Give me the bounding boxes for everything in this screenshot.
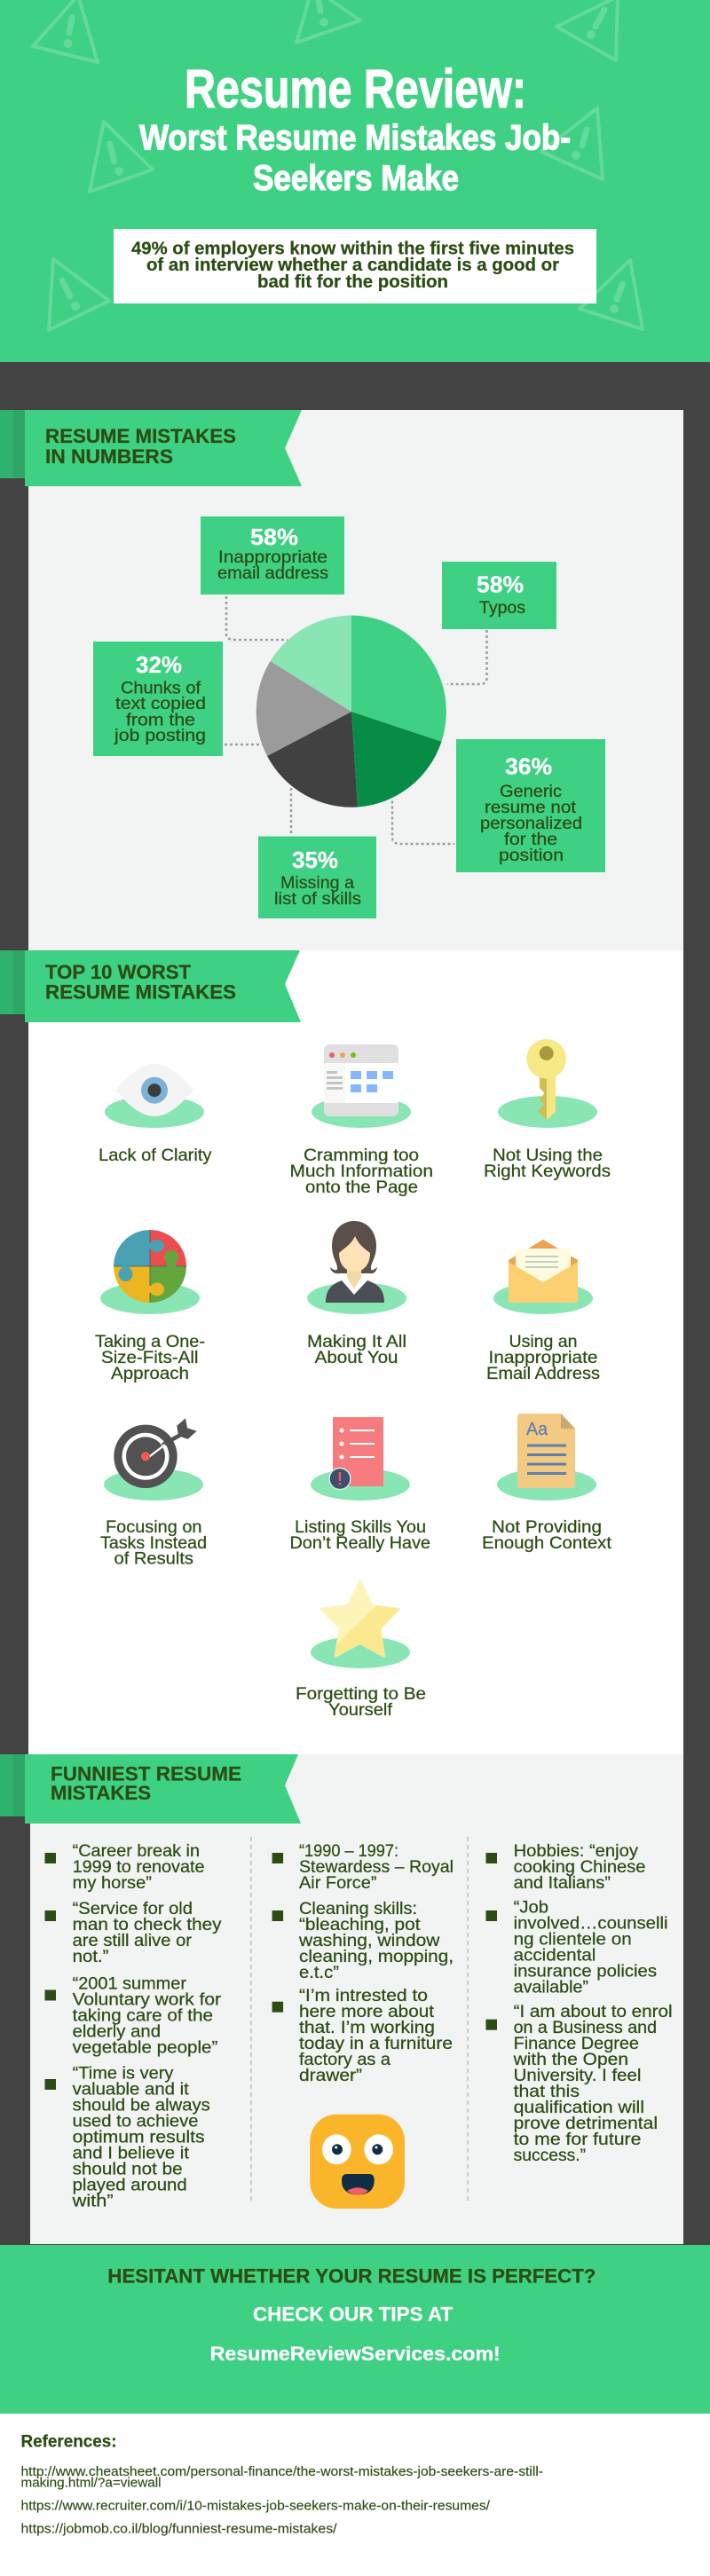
column 1 quotes: my horse” <box>73 1874 152 1893</box>
column 3 quotes: and Italians” <box>514 1874 611 1893</box>
title: Resume Review: <box>185 59 526 119</box>
column 1 quotes: 1999 to renovate <box>73 1858 205 1877</box>
column 3 quotes: success.” <box>514 2147 586 2165</box>
column 3 quotes: that this <box>514 2083 580 2101</box>
callout: generic resume: resume not <box>485 799 577 817</box>
callout: generic resume: Generic <box>500 783 562 801</box>
item: not using the right keywords <box>484 1039 611 1181</box>
callout: missing skills <box>258 836 376 918</box>
heading banner: funniest: MISTAKES <box>51 1782 151 1804</box>
column 1 quotes: not.” <box>73 1948 108 1966</box>
title <box>139 59 571 198</box>
item: not providing enough context: Enough Context <box>482 1534 612 1553</box>
item: lack of clarity: Lack of Clarity <box>99 1146 212 1165</box>
item: not using the right keywords: Not Using the <box>493 1146 603 1165</box>
column 1 quotes: optimum results <box>73 2128 205 2147</box>
callout: typos: Typos <box>479 599 525 618</box>
heading banner: top 10: RESUME MISTAKES <box>45 981 236 1004</box>
pie chart <box>256 616 446 807</box>
panel: resume mistakes in numbers <box>0 410 683 950</box>
call to action banner: ResumeReviewServices.com! <box>210 2343 501 2365</box>
column 1 quotes: should be always <box>73 2096 210 2115</box>
item: listing skills you don't have: Listing Skills You <box>295 1518 426 1537</box>
intro statistic box: bad fit for the position <box>257 272 448 292</box>
column 3 quotes: “I am about to enrol <box>514 2003 673 2021</box>
item: focusing on tasks <box>100 1418 207 1569</box>
header panel <box>0 0 710 362</box>
item: listing skills you don't have: Don’t Really Have <box>289 1534 430 1553</box>
column 3 quotes: insurance policies <box>514 1963 657 1981</box>
item: not providing enough context: Not Providing <box>492 1518 602 1537</box>
column 2 quotes: Cleaning skills: <box>299 1900 417 1918</box>
column 1 quotes: used to achieve <box>73 2112 198 2131</box>
column 2 quotes: here more about <box>299 2003 435 2021</box>
column 2 quotes: drawer” <box>299 2067 362 2085</box>
icon: eye <box>115 1064 193 1116</box>
column 2 quotes: factory as a <box>299 2051 390 2069</box>
callout: generic resume: for the <box>504 831 557 849</box>
item: cramming too much information: onto the Page <box>305 1178 418 1197</box>
icon: surprised face <box>310 2115 405 2209</box>
callout: generic resume <box>456 739 605 872</box>
column 3 quotes: available” <box>514 1979 588 1997</box>
icon: envelope <box>509 1240 578 1303</box>
warning triangles background <box>33 0 643 330</box>
item: not providing enough context <box>482 1414 612 1553</box>
item: forgetting to be yourself: Yourself <box>328 1701 393 1720</box>
column 2 quotes: cleaning, mopping, <box>299 1948 454 1966</box>
column 3 quotes: University. I feel <box>514 2067 641 2085</box>
item: making it all about you: Making It All <box>307 1333 406 1351</box>
column 3 quotes: with the Open <box>512 2051 628 2069</box>
column 3 quotes <box>486 1842 673 2165</box>
item: not using the right keywords: Right Keywords <box>484 1162 611 1181</box>
item: one-size-fits-all: Size-Fits-All <box>101 1349 199 1367</box>
heading banner: top 10 <box>0 950 301 1022</box>
item: focusing on tasks: Focusing on <box>106 1518 202 1537</box>
column 1 quotes: with” <box>71 2192 114 2211</box>
callout: missing skills: 35% <box>292 847 338 873</box>
heading banner: resume mistakes in numbers: IN NUMBERS <box>45 445 173 468</box>
column 1 quotes: elderly and <box>73 2022 161 2041</box>
column 3 quotes: Hobbies: “enjoy <box>514 1842 639 1861</box>
column 1 quotes: and I believe it <box>73 2144 190 2163</box>
callout: inappropriate email: Inappropriate <box>218 548 327 567</box>
intro statistic box: 49% of employers know within the first five minutes <box>131 240 574 259</box>
icon: document <box>517 1414 575 1488</box>
call to action banner: HESITANT WHETHER YOUR RESUME IS PERFECT? <box>107 2265 596 2288</box>
column 3 quotes: cooking Chinese <box>514 1858 646 1877</box>
column 1 quotes: valuable and it <box>73 2080 190 2099</box>
callout: typos <box>442 562 556 629</box>
column 3 quotes: Finance Degree <box>514 2035 639 2053</box>
heading banner: top 10: TOP 10 WORST <box>45 961 192 983</box>
column 3 quotes: to me for future <box>514 2131 641 2149</box>
callout: generic resume: 36% <box>505 752 552 779</box>
item: making it all about you: About You <box>315 1349 398 1367</box>
column 3 quotes: qualification will <box>514 2099 644 2117</box>
column 1 quotes: should not be <box>73 2160 183 2179</box>
item: one-size-fits-all <box>95 1230 205 1383</box>
column 3 quotes: ng clientele on <box>514 1931 632 1950</box>
callout: chunks of text: job posting <box>114 727 206 745</box>
callout: missing skills: Missing a <box>280 874 354 893</box>
title: Seekers Make <box>253 159 459 198</box>
callout: chunks of text: Chunks of <box>121 679 201 697</box>
item: inappropriate email address: Inappropriate <box>488 1349 598 1367</box>
callout: chunks of text: text copied <box>115 695 206 713</box>
callout: chunks of text <box>93 642 223 756</box>
item: inappropriate email address <box>486 1240 600 1383</box>
item: cramming too much information: Cramming too <box>304 1146 419 1165</box>
column 1 quotes: played around <box>73 2176 187 2195</box>
column 2 quotes: washing, window <box>298 1932 440 1950</box>
icon: star <box>320 1580 399 1657</box>
intro statistic box <box>114 229 596 303</box>
column 3 quotes: prove detrimental <box>514 2115 658 2133</box>
item: listing skills you don't have <box>289 1417 430 1553</box>
item: one-size-fits-all: Taking a One- <box>95 1333 205 1351</box>
column 3 quotes: involved…counselli <box>514 1915 667 1934</box>
column 1 quotes: “2001 summer <box>73 1974 187 1993</box>
callout: generic resume: personalized <box>480 815 582 833</box>
column 2 quotes: “1990 – 1997: <box>299 1842 398 1861</box>
column 1 quotes: vegetable people” <box>73 2038 217 2057</box>
icon: woman <box>326 1221 384 1303</box>
column 3 quotes: on a Business and <box>514 2019 657 2037</box>
column 2 quotes: Stewardess – Royal <box>299 1858 454 1877</box>
leader lines <box>225 596 486 844</box>
callout: missing skills: list of skills <box>274 890 361 909</box>
column 1 quotes: “Service for old <box>73 1900 193 1918</box>
column 1 quotes <box>44 1842 222 2211</box>
intro statistic box: of an interview whether a candidate is a good or <box>146 256 559 275</box>
column 2 quotes <box>272 1842 454 2085</box>
references: https://jobmob.co.il/blog/funniest-resume-mistakes/ <box>21 2522 337 2537</box>
item: inappropriate email address: Using an <box>509 1333 577 1351</box>
column 3 quotes: “Job <box>514 1899 548 1918</box>
panel: top 10 worst resume mistakes <box>0 950 683 1754</box>
references <box>21 2432 543 2537</box>
column 2 quotes: e.t.c” <box>299 1964 339 1982</box>
item: making it all about you <box>307 1221 406 1367</box>
callout: chunks of text: 32% <box>136 651 182 678</box>
column 1 quotes: “Career break in <box>73 1842 200 1861</box>
column 1 quotes: man to check they <box>73 1916 222 1934</box>
column 2 quotes: today in a furniture <box>299 2035 453 2053</box>
column 3 quotes: accidental <box>514 1947 596 1965</box>
icon: browser window <box>324 1044 398 1116</box>
icon: puzzle <box>114 1230 186 1303</box>
item: inappropriate email address: Email Address <box>486 1365 600 1383</box>
item: one-size-fits-all: Approach <box>111 1365 189 1383</box>
item: forgetting to be yourself: Forgetting to Be <box>296 1685 426 1704</box>
column 2 quotes: Air Force” <box>299 1874 376 1893</box>
heading banner: funniest <box>0 1754 301 1824</box>
column 2 quotes: “I’m intrested to <box>299 1987 428 2005</box>
references: making.html/?a=viewall <box>21 2476 162 2491</box>
callout: inappropriate email <box>201 516 344 595</box>
icon: key <box>526 1039 566 1120</box>
item: lack of clarity <box>99 1064 212 1165</box>
dark page frame <box>0 362 710 2245</box>
title: Worst Resume Mistakes Job- <box>139 118 571 157</box>
column dividers <box>251 1837 468 2204</box>
column 1 quotes: taking care of the <box>73 2006 213 2025</box>
column 1 quotes: are still alive or <box>73 1932 193 1950</box>
references: https://www.recruiter.com/i/10-mistakes-job-seekers-make-on-their-resumes/ <box>21 2499 491 2514</box>
callout: chunks of text: from the <box>126 712 195 729</box>
call to action banner: CHECK OUR TIPS AT <box>253 2304 454 2326</box>
item: cramming too much information: Much Information <box>289 1162 433 1181</box>
heading banner: funniest: FUNNIEST RESUME <box>51 1762 241 1784</box>
callout: inappropriate email: email address <box>217 564 328 583</box>
references: http://www.cheatsheet.com/personal-finance/the-worst-mistakes-job-seekers-are-still- <box>21 2464 543 2479</box>
callout: generic resume: position <box>499 847 564 865</box>
heading banner: resume mistakes in numbers <box>0 410 302 486</box>
icon: document: Aa <box>526 1420 548 1439</box>
callout: inappropriate email: 58% <box>250 524 298 550</box>
item: focusing on tasks: Tasks Instead <box>100 1534 207 1553</box>
column 2 quotes: “bleaching, pot <box>299 1916 421 1934</box>
callout: typos: 58% <box>477 571 524 598</box>
references: References: <box>21 2432 117 2451</box>
panel: funniest resume mistakes <box>0 1754 683 2244</box>
call to action banner <box>0 2245 710 2414</box>
item: focusing on tasks: of Results <box>114 1550 193 1569</box>
icon: skills list <box>329 1417 383 1489</box>
item: cramming too much information <box>289 1044 433 1197</box>
column 1 quotes: “Time is very <box>73 2064 174 2084</box>
column 1 quotes: Voluntary work for <box>73 1990 222 2009</box>
heading banner: resume mistakes in numbers: RESUME MISTAKES <box>45 425 236 447</box>
column 2 quotes: that. I’m working <box>299 2019 435 2037</box>
item: forgetting to be yourself <box>296 1580 426 1720</box>
icon: target <box>114 1418 197 1488</box>
